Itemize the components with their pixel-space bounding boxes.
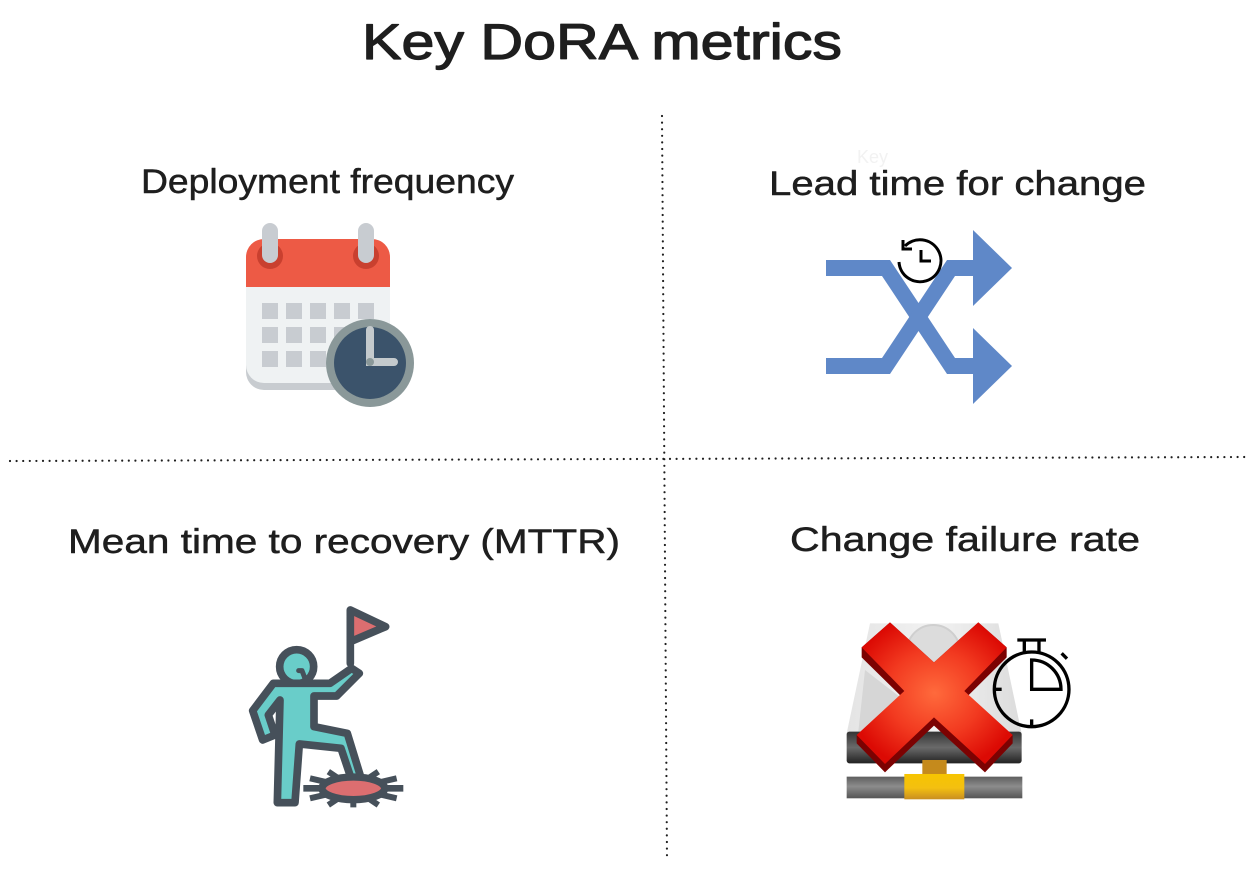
heading: change failure rate: Change failure rate <box>790 521 1140 559</box>
heading: lead time for change: Lead time for change <box>769 165 1146 203</box>
icon: stopwatch <box>994 640 1069 727</box>
icon: failed network drive <box>847 622 1022 799</box>
panel: deployment frequency <box>141 163 514 407</box>
panel: lead time for change <box>769 147 1146 404</box>
vertical dotted divider <box>662 116 667 860</box>
heading: deployment frequency: Deployment frequency <box>141 163 514 201</box>
icon: flag <box>350 610 386 663</box>
horizontal dotted divider <box>10 457 1248 461</box>
icon: calendar with clock <box>246 223 414 407</box>
panel: change failure rate <box>790 521 1140 799</box>
icon: burst target <box>303 772 403 807</box>
panel: mean time to recovery <box>68 523 620 807</box>
icon: clock with history arrow <box>899 240 941 282</box>
icon: crossing arrows <box>826 230 1012 404</box>
title: Key DoRA metrics <box>362 14 842 70</box>
faint ghost text: Key <box>857 147 888 167</box>
icon: person stepping on target <box>253 650 362 803</box>
heading: mean time to recovery: Mean time to recovery (MTTR) <box>68 523 620 561</box>
